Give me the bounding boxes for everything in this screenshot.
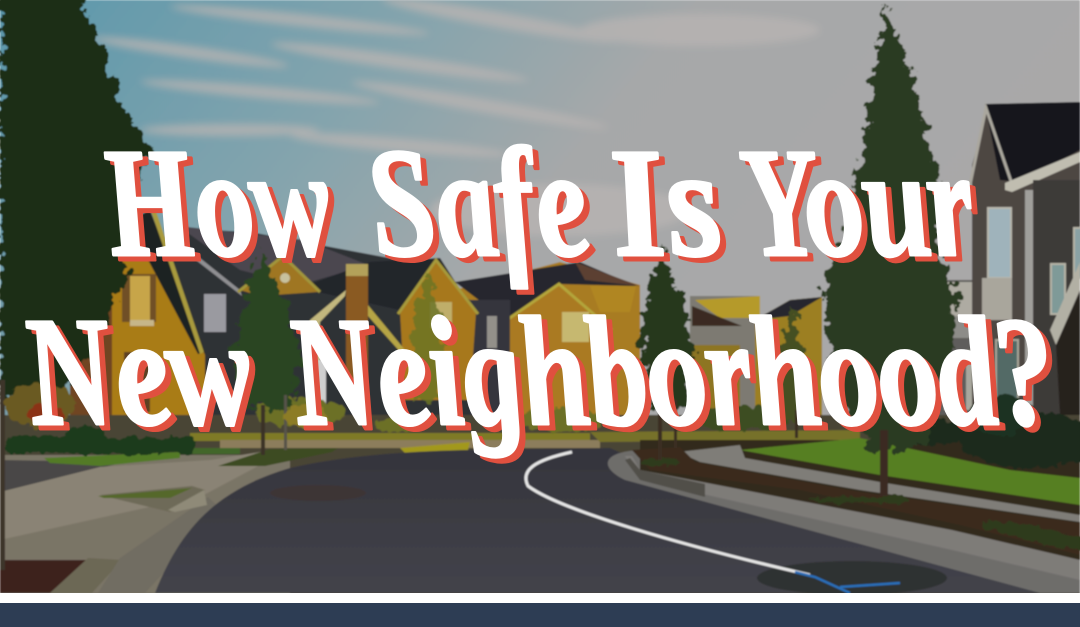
title face: Safe: [350, 117, 604, 290]
right kerb, lawn and walk: [625, 412, 1080, 580]
far houses right of centre: [690, 296, 822, 421]
right gutter: [608, 450, 1080, 593]
title shadow: Safe: [356, 122, 610, 295]
title face: New: [4, 286, 269, 459]
title shadow: How: [89, 122, 354, 295]
tree far right: [780, 305, 805, 420]
tall tree right: [822, 5, 958, 450]
white strip: [0, 593, 1080, 603]
left lawn and sidewalks: [0, 426, 338, 595]
tree centre: [232, 250, 302, 410]
title face: How: [83, 117, 348, 290]
title shadow: New: [10, 291, 275, 464]
title shadow: Is: [595, 122, 743, 295]
sky: [0, 0, 1080, 460]
road: [155, 448, 1080, 595]
tree mid right: [640, 245, 695, 410]
house: yellow brick gable: [70, 208, 205, 420]
low garden shrubs: [5, 383, 1035, 435]
navy footer band: [0, 603, 1080, 627]
title shadow: [10, 122, 1078, 464]
right house: [925, 102, 1080, 460]
big tree left: [0, 0, 150, 400]
title shadow: Your: [732, 122, 998, 295]
road line: [526, 452, 810, 575]
tree amber: [412, 270, 445, 400]
house: orange gable: [455, 262, 640, 420]
title face: Your: [726, 117, 992, 290]
ground band: [0, 398, 1080, 595]
title face: Is: [589, 117, 737, 290]
title: [4, 117, 1078, 464]
title face: [4, 117, 1072, 459]
house: dark grey middle: [165, 226, 478, 420]
